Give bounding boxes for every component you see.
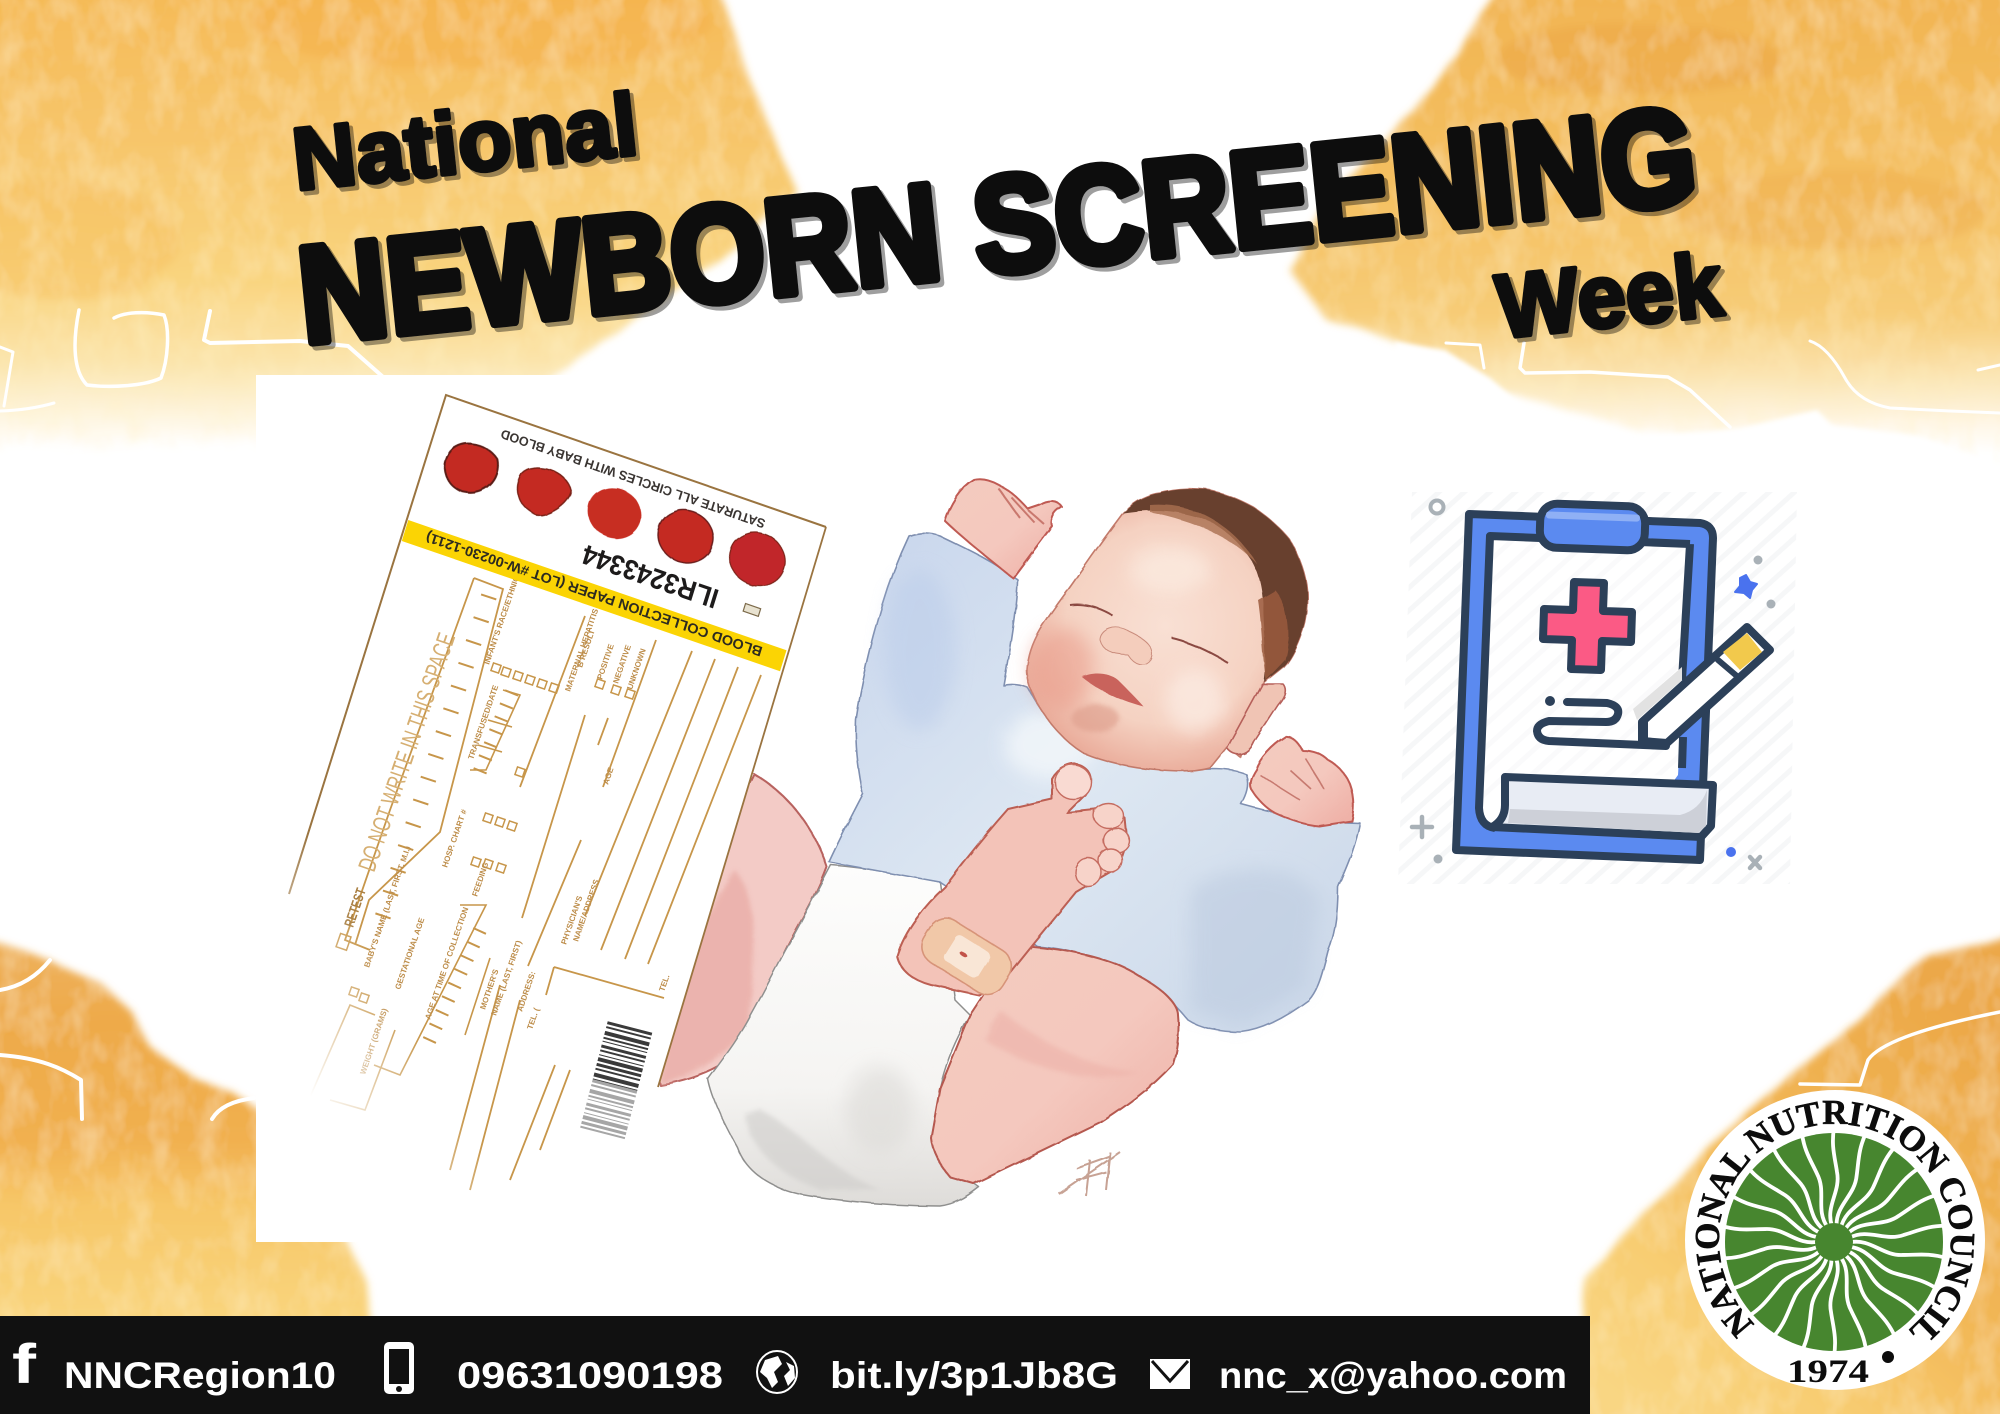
small field labels: ADDRESS: [515,970,537,1013]
blood spot 1 [439,436,503,500]
card faded lines [289,395,826,1190]
decor dots [1434,556,1776,864]
blood dot [958,950,969,959]
small field labels: MOTHER'S [478,967,501,1011]
head [1027,489,1307,771]
blood spot 2 [511,461,575,524]
contact bar [0,1316,1590,1414]
leg shadow [985,1010,1140,1077]
pen shadow [1633,667,1682,720]
logo dot [1882,1351,1894,1363]
collection ticks [425,930,480,1050]
name grid frame [345,578,503,950]
small field labels: BABY'S NAME (LAST, FIRST, M.I.) [362,845,413,969]
card serial: ILR3243344 [578,538,722,614]
decorative brush strokes [0,310,2000,1119]
envelope fold [1152,1361,1188,1381]
hair reddish edge [1258,590,1288,680]
big toe [1055,765,1091,799]
white brush below top right wash [1395,342,2000,560]
transfusion grid [470,690,520,770]
plaster [915,912,1019,1001]
logo name: NATIONAL NUTRITION COUNCIL [1695,1100,1975,1340]
note dot [1545,696,1555,706]
small field labels: TEL. [657,973,672,993]
shirt highlight [1004,711,1096,779]
title line: NEWBORN SCREENING: NEWBORN SCREENING [292,79,1703,373]
small field labels: AGE AT TIME OF COLLECTION [423,906,470,1021]
pen band [1645,660,1738,740]
do not write comb [380,596,489,925]
back leg [640,774,827,1085]
small field labels: INFANT'S RACE/ETHNICITY [482,562,525,666]
diaper [708,865,979,1206]
small field labels: UNKNOWN [625,647,648,691]
nose [1100,627,1152,665]
blood spots [439,428,791,599]
icon: clipboard with medical cross [1398,492,1797,884]
paper hatch [1480,536,1688,820]
phone body [384,1342,414,1394]
decor star [1735,575,1757,598]
globe continents [760,1356,795,1388]
bottom roll [1492,777,1713,837]
icon: facebook: f [12,1332,36,1395]
small field labels: B RESULT [575,628,597,669]
cheek blush [1030,628,1094,708]
facebook handle: NNCRegion10 [64,1355,336,1396]
small field labels: TEL. ( [525,1006,541,1031]
paper outline [1479,536,1690,828]
email address: nnc_x@yahoo.com [1219,1355,1567,1396]
small field labels [358,562,672,1076]
toes [1075,804,1129,886]
small field labels: NAME/ADDRESS [571,878,601,943]
white brush along left edge [0,440,260,935]
envelope body [1150,1359,1190,1389]
watercolour wash: bottom left [0,935,372,1330]
ear [1227,684,1285,754]
decor ring [1430,500,1444,514]
title [288,74,1728,373]
hair [1123,489,1307,682]
long form lines [450,616,761,1190]
small field labels: FEEDING [470,861,490,898]
small field labels: POSITIVE [595,642,616,681]
back leg crease [660,870,754,1085]
transfusion ticks [478,692,512,776]
eye right [1172,638,1227,662]
clip [1539,503,1646,551]
diaper grey patch [846,1066,914,1154]
hair highlights [1150,505,1258,565]
small mark [743,604,761,616]
logo: National Nutrition Council [1685,1090,1985,1390]
yellow band [402,520,787,671]
card edges [289,395,826,894]
physician box line [546,967,664,998]
front leg [931,946,1179,1184]
globe outline [757,1351,797,1393]
small field labels: WEIGHT (GRAMS) [358,1007,390,1076]
phone number: 09631090198 [457,1355,723,1396]
checkboxes [336,663,635,1003]
small field labels: NAME (LAST, FIRST) [489,939,524,1017]
shirt [829,533,1360,1032]
small field labels: PHYSICIAN'S [559,894,585,946]
upper hand [945,479,1062,578]
mouth [1082,674,1144,707]
phone button [396,1386,402,1392]
pen [1642,627,1770,743]
hatched backdrop [1398,492,1797,884]
logo hub [1815,1223,1853,1261]
right hand [1250,737,1354,826]
clipboard board [1456,514,1713,860]
icon: envelope [1150,1359,1190,1389]
wavy rays [1721,1128,1947,1356]
small field labels: NEGATIVE [611,643,633,685]
card right edge [658,527,826,1087]
icon: phone [384,1342,414,1394]
blood spot 3 [582,480,647,546]
blood collection card [289,395,826,1240]
white panel behind artwork [256,375,1456,1242]
sleeve shade [884,570,956,730]
blood spot 5 [723,525,791,593]
shirt folds [1190,869,1320,1025]
small field labels: AGE [601,766,616,786]
blood spot 4 [652,503,720,570]
logo disc [1685,1090,1985,1390]
right cheek [1165,668,1225,732]
artist signature [1059,1152,1120,1196]
diaper shading [745,1110,880,1190]
small field labels: GESTATIONAL AGE [393,916,427,991]
note scribble [1537,702,1666,746]
icon: globe [757,1351,797,1393]
watercolour wash: bottom right [1575,930,2000,1414]
do not write notice: DO NOT WRITE IN THIS SPACE [353,629,461,875]
roll shadow [1508,790,1707,833]
baby illustration [640,479,1360,1206]
logo year: 1974 [1787,1354,1869,1390]
logo text path [1719,1124,1951,1330]
bar background [0,1316,1590,1414]
decor cross [1750,857,1760,868]
small field labels: HOSP. CHART # [440,808,469,869]
upper hand fingers [998,488,1044,524]
feeding box [374,905,490,1075]
chin shadow [1071,704,1119,732]
pad [942,933,992,980]
forehead highlight [1130,546,1210,594]
phone screen [389,1349,409,1384]
band text: BLOOD COLLECTION PAPER (LOT #W-00230-1211) [424,529,764,660]
watercolour wash: top right [1288,0,2000,460]
clip highlight [1546,511,1640,522]
medical cross [1543,582,1632,670]
small field labels: TRANSFUSED/DATE [466,683,501,761]
foot [897,764,1127,995]
weight box [313,1004,396,1111]
retest label: RETEST [341,886,369,929]
card face layout [402,406,822,671]
paper sheet [1479,536,1700,830]
barcode [602,1027,630,1135]
band-aid [915,912,1019,1001]
website link: bit.ly/3p1Jb8G [830,1355,1118,1396]
green sun wheel [1725,1133,1943,1351]
right hand fingers [1260,758,1325,800]
eye left [1070,605,1112,615]
title line: National: National [288,74,642,209]
pen eraser [1723,633,1762,670]
small field labels: MATERNAL HEPATITIS [563,607,600,693]
card paper [289,395,826,1240]
decor plus [1412,817,1432,837]
instruction text: SATURATE ALL CIRCLES WITH BABY BLOOD [499,426,767,531]
watercolour wash: top left [0,0,795,450]
title line: Week: Week [1492,235,1728,358]
decor blue dot [1726,847,1736,857]
